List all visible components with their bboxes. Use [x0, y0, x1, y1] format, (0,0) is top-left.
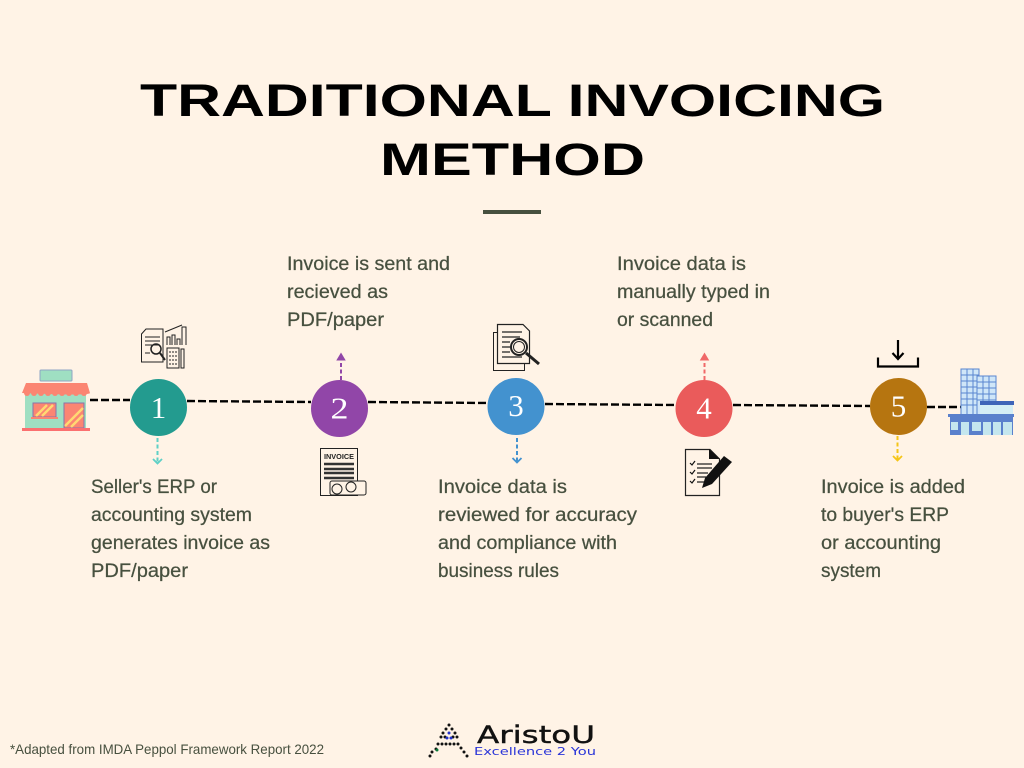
step 4: number badge: 4 [696, 390, 712, 426]
step 3: arrow [512, 438, 522, 462]
step 1: report icon [142, 325, 186, 368]
step 2: invoice icon: INVOICE [324, 452, 354, 461]
step 1: text: Seller's ERP or [91, 476, 217, 498]
step 4: number badge [676, 380, 732, 437]
logo mark [428, 724, 468, 758]
step 3: number badge: 3 [508, 388, 524, 423]
step 2: text: PDF/paper [287, 309, 385, 331]
step 3: number badge [488, 378, 544, 435]
step 3: text: and compliance with [438, 532, 617, 554]
step 3: text [438, 476, 637, 582]
step 3: text: reviewed for accuracy [438, 504, 637, 526]
step 1: text: PDF/paper [91, 560, 189, 582]
step 1: text [91, 476, 270, 582]
step 4: arrow [702, 354, 708, 380]
step 5: number badge: 5 [891, 388, 906, 424]
step 5: text [821, 476, 965, 582]
step 4: text: or scanned [617, 309, 713, 331]
step 4: checklist and pen icon [686, 449, 732, 496]
step 1: number badge: 1 [151, 390, 166, 425]
step 2: arrow [338, 354, 344, 380]
dashed timeline [90, 400, 962, 407]
step 5: text: or accounting [821, 532, 941, 554]
AristoU logo: Excellence 2 You [474, 745, 596, 758]
step 3: text: Invoice data is [438, 476, 567, 498]
title: METHOD [380, 134, 645, 185]
AristoU logo [428, 721, 596, 758]
step 5: text: Invoice is added [821, 476, 965, 498]
title [140, 75, 885, 185]
title: TRADITIONAL INVOICING [140, 75, 885, 126]
source footnote: *Adapted from IMDA Peppol Framework Report 2022 [10, 741, 324, 757]
AristoU logo: AristoU [477, 721, 595, 749]
step 5: number badge [870, 378, 927, 435]
step 4: text: Invoice data is [617, 253, 746, 275]
step 5: arrow [893, 436, 902, 460]
step 4: text: manually typed in [617, 281, 770, 303]
step 2: text: recieved as [287, 281, 388, 303]
step 2: invoice icon [320, 448, 366, 496]
step 3: text: business rules [438, 560, 559, 582]
icon: buyer building [948, 369, 1014, 435]
step 1: number badge [130, 379, 187, 436]
step 1: text: accounting system [91, 504, 252, 526]
step 5: download icon [878, 340, 918, 366]
step 1: text: generates invoice as [91, 532, 270, 554]
step 2: text [287, 253, 450, 331]
step 5: text: system [821, 560, 881, 582]
step 3: document search icon [494, 324, 539, 370]
step 4: text [617, 253, 770, 331]
step 2: number badge: 2 [330, 390, 348, 426]
step 2: text: Invoice is sent and [287, 253, 450, 275]
step 5: text: to buyer's ERP [821, 504, 949, 526]
step 2: number badge [311, 380, 368, 437]
step 1: arrow [153, 438, 162, 464]
icon: seller shop [22, 370, 90, 431]
